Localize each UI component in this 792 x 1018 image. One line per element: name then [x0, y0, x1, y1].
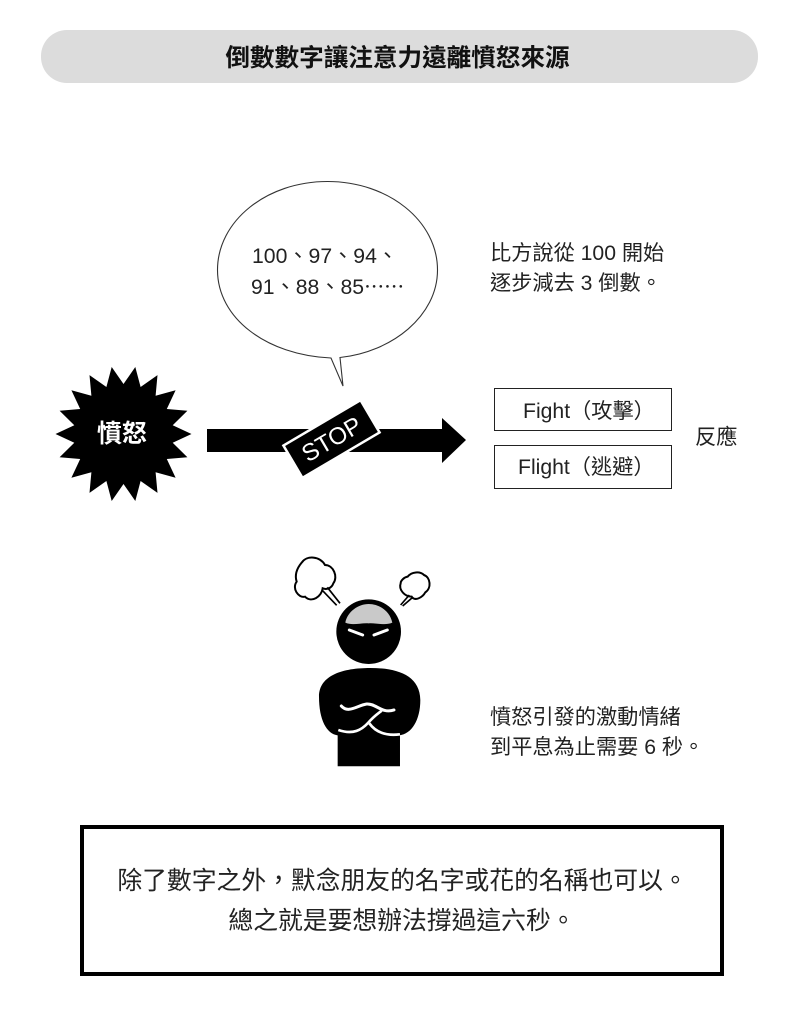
explanation: counting down by threes: [490, 241, 664, 295]
conclusion box: 除了數字之外，默念朋友的名字或花的名稱也可以。: [117, 867, 688, 895]
icon: anger starburst: 憤怒: [97, 420, 147, 448]
icon: right steam cloud: [400, 572, 430, 606]
reaction label: 反應: [695, 424, 737, 449]
reaction box: fight: Fight（攻擊）: [523, 399, 655, 423]
reaction box: flight: Flight（逃避）: [518, 455, 655, 479]
conclusion box: 總之就是要想辦法撐過這六秒。: [228, 907, 576, 935]
head: [336, 599, 401, 664]
icon: anger starburst: [56, 367, 192, 501]
speech bubble with countdown numbers: [218, 182, 438, 386]
explanation: six seconds to calm: [490, 705, 704, 759]
icon: left steam cloud: [295, 558, 340, 605]
stop sign on arrow: [282, 398, 381, 480]
speech bubble with countdown numbers: 91、88、85……: [251, 271, 404, 300]
body with crossed arms: [319, 668, 420, 766]
reaction box: fight: [494, 388, 672, 430]
stop sign on arrow: STOP: [297, 412, 367, 468]
conclusion box: [82, 827, 722, 974]
explanation: six seconds to calm: 到平息為止需要 6 秒。: [490, 735, 704, 759]
icon: angry person with crossed arms: [295, 558, 430, 766]
title banner: [41, 30, 758, 83]
reaction box: flight: [494, 446, 672, 488]
arrow from anger to reaction: [207, 418, 466, 463]
explanation: six seconds to calm: 憤怒引發的激動情緒: [490, 705, 681, 729]
explanation: counting down by threes: 比方說從 100 開始: [490, 241, 664, 265]
title banner: 倒數數字讓注意力遠離憤怒來源: [225, 43, 570, 72]
explanation: counting down by threes: 逐步減去 3 倒數。: [490, 271, 662, 295]
speech bubble with countdown numbers: 100、97、94、: [252, 245, 398, 268]
